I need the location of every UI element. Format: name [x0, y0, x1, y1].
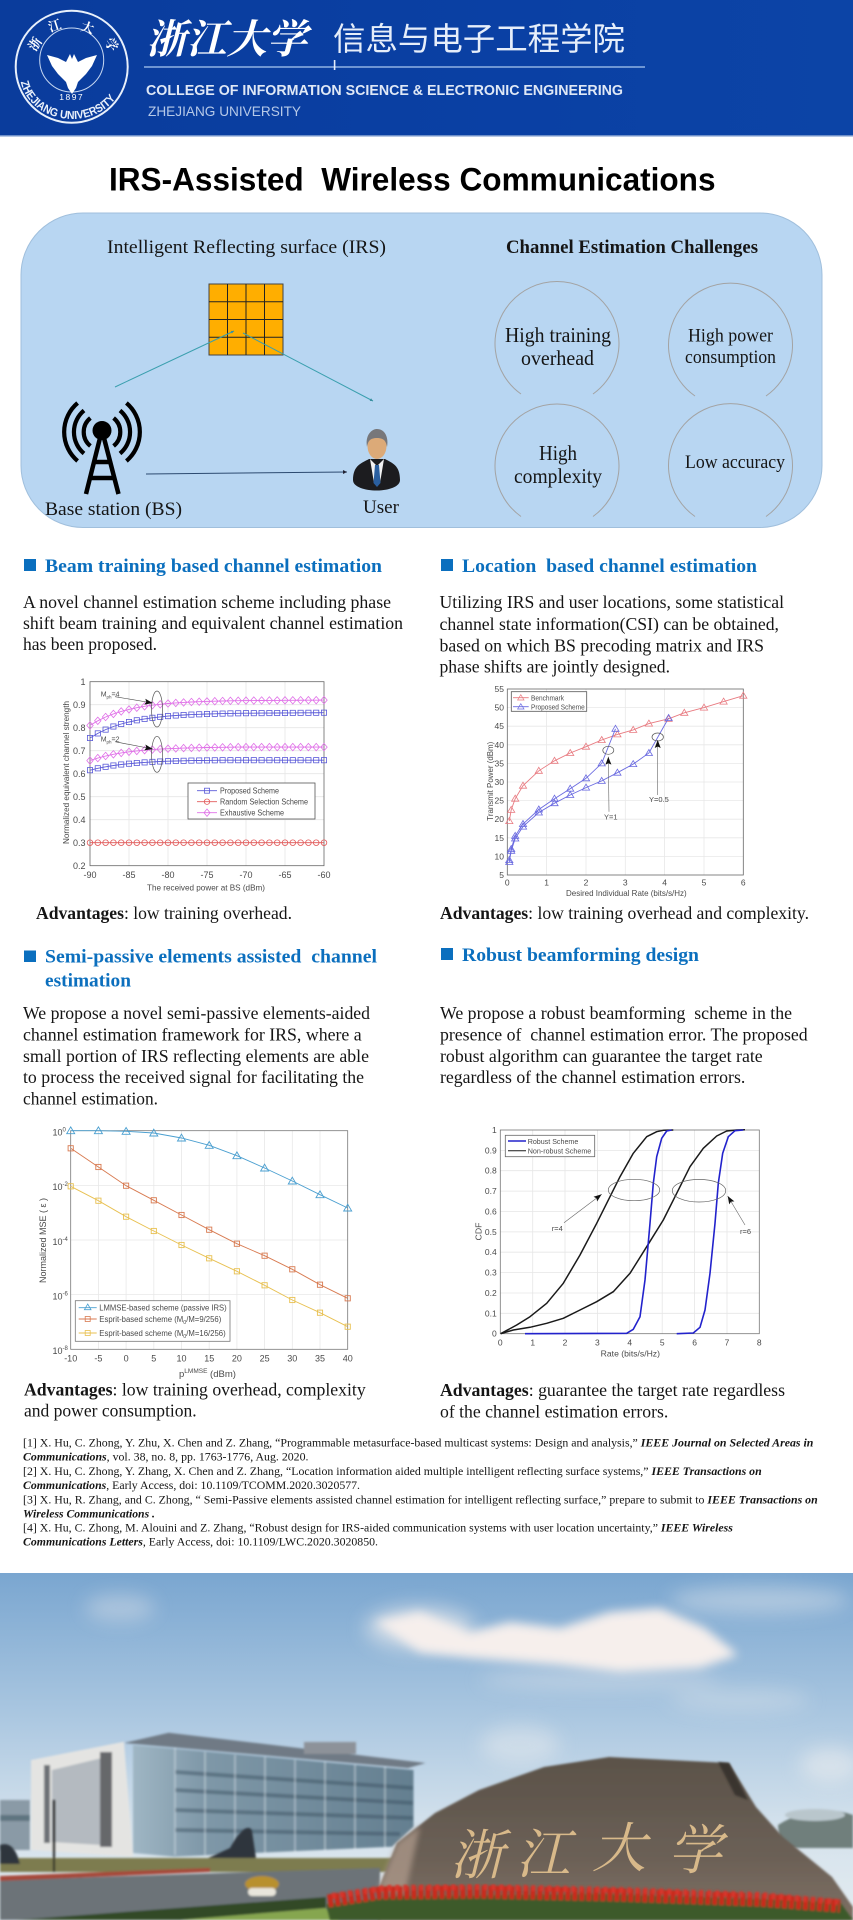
- heading: Semi-passive elements assisted channel: [45, 948, 377, 968]
- line chart: CDF of rate: 0.9: [485, 1145, 497, 1155]
- line chart: CDF of rate: 0.8: [485, 1166, 497, 1176]
- body text: We propose a novel semi-passive elements-aided: [23, 1003, 370, 1023]
- icon: base station: [64, 403, 140, 494]
- legend: Benchmark: [531, 693, 564, 702]
- line chart: CDF of rate: 1: [492, 1125, 497, 1135]
- legend: [75, 1301, 230, 1341]
- distant buildings: [0, 1800, 853, 1850]
- references: Communications, Early Access, doi: 10.1109/TCOMM.2020.3020577.: [23, 1480, 360, 1492]
- advantages: [440, 1380, 785, 1421]
- line chart: transmit power: 5: [499, 870, 504, 880]
- challenge: high complexity: High: [539, 441, 577, 465]
- references: [4] X. Hu, C. Zhong, M. Alouini and Z. Zhang, “Robust design for IRS-aided communication systems with user location uncertainty,” IEEE Wireless: [23, 1523, 733, 1535]
- line chart: CDF of rate: 3: [595, 1338, 600, 1348]
- line chart: normalized MSE: -6: [63, 1291, 69, 1297]
- body text: [23, 592, 403, 654]
- panel: location based: [440, 557, 809, 923]
- references: Communications Letters , Early Access, doi: 10.1109/LWC.2020.3020850.: [23, 1537, 378, 1549]
- line chart: transmit power: Υ=1: [604, 812, 618, 821]
- line chart: CDF of rate: 0.6: [485, 1206, 497, 1216]
- line chart: normalized MSE: 10: [52, 1346, 63, 1356]
- body text: shift beam training and equivalent channel estimation: [23, 613, 403, 633]
- line chart: CDF of rate: 0: [492, 1329, 497, 1339]
- line chart: equivalent channel strength: 1: [80, 677, 86, 687]
- icon: university logo seal: [14, 10, 129, 124]
- line chart: CDF of rate: 0.3: [485, 1268, 497, 1278]
- legend: Proposed Scheme: [531, 702, 585, 711]
- line chart: normalized MSE: 35: [315, 1354, 325, 1364]
- line chart: equivalent channel strength: 0.5: [73, 792, 86, 802]
- body text: [440, 1003, 808, 1087]
- references: [23, 1438, 818, 1549]
- references: [2] X. Hu, C. Zhong, Y. Zhang, X. Chen and Z. Zhang, “Location information aided multiple intelligent reflecting surface systems,” IEEE Transactions on: [23, 1466, 762, 1478]
- icon: university logo seal: 大: [79, 16, 97, 38]
- legend: Robust Scheme: [528, 1137, 578, 1146]
- legend: Proposed Scheme: [220, 786, 279, 796]
- line chart: transmit power: 30: [495, 777, 504, 787]
- body text: robust algorithm can guarantee the target rate: [440, 1046, 763, 1066]
- stone: [378, 1757, 853, 1920]
- line chart: CDF of rate: 4: [627, 1338, 632, 1348]
- challenge: high power consumption: [668, 283, 792, 396]
- line chart: equivalent channel strength: -70: [239, 870, 253, 880]
- line chart: CDF of rate: 7: [725, 1338, 730, 1348]
- line chart: normalized MSE: 10: [52, 1182, 63, 1192]
- line chart: equivalent channel strength: M: [101, 692, 107, 699]
- line chart: normalized MSE: 10: [52, 1128, 63, 1138]
- heading: [45, 948, 377, 992]
- line chart: transmit power: 45: [495, 721, 504, 731]
- line chart: normalized MSE: [38, 1128, 353, 1380]
- legend: Esprit-based scheme (M: [99, 1315, 186, 1324]
- line chart: transmit power: 6: [741, 878, 746, 888]
- line chart: equivalent channel strength: 0.4: [73, 815, 86, 825]
- line chart: equivalent channel strength: -60: [317, 870, 331, 880]
- campus photo illustration: [0, 1573, 853, 1920]
- panel: semi-passive elements: [23, 948, 377, 1420]
- line chart: normalized MSE: -10: [64, 1354, 77, 1364]
- line chart: CDF of rate: 0.7: [485, 1186, 497, 1196]
- line chart: CDF of rate: [474, 1125, 762, 1359]
- line chart: equivalent channel strength: -90: [83, 870, 97, 880]
- challenge: low accuracy: Low accuracy: [685, 453, 786, 473]
- line chart: normalized MSE: -4: [63, 1237, 69, 1243]
- line chart: normalized MSE: Normalized MSE ( ε ): [38, 1198, 49, 1283]
- line chart: transmit power: 4: [662, 878, 667, 888]
- body text: small portion of IRS reflecting elements are able: [23, 1046, 369, 1066]
- legend: Esprit-based scheme (M: [99, 1329, 186, 1338]
- line chart: transmit power: Υ=0.5: [649, 795, 669, 804]
- body text: channel estimation framework for IRS, where a: [23, 1024, 362, 1044]
- references: Wireless Communications .: [23, 1508, 155, 1520]
- heading: Location based channel estimation: [462, 557, 758, 577]
- line chart: normalized MSE: 5: [151, 1354, 156, 1364]
- line chart: equivalent channel strength: 0.3: [73, 838, 86, 848]
- title: IRS-Assisted Wireless Communications: [109, 162, 716, 198]
- line chart: transmit power: [485, 684, 746, 898]
- line chart: CDF of rate: 0.5: [485, 1227, 497, 1237]
- heading: IRS: Intelligent Reflecting surface (IRS): [107, 238, 386, 258]
- challenge: high training overhead: High training: [505, 323, 611, 347]
- icon: university logo seal: ZHEJIANG UNIVERSITY: [20, 80, 114, 119]
- line chart: normalized MSE: 10: [52, 1291, 63, 1301]
- flowers: [326, 1887, 853, 1920]
- body text: has been proposed.: [23, 634, 157, 654]
- challenge: high training overhead: [495, 282, 619, 394]
- body text: [23, 1003, 370, 1108]
- bullet: [24, 559, 36, 571]
- line chart: CDF of rate: r=6: [740, 1227, 751, 1236]
- line chart: equivalent channel strength: 0.2: [73, 861, 86, 871]
- advantages: [24, 1379, 367, 1420]
- line chart: transmit power: 50: [495, 703, 504, 713]
- icon: university logo seal: 江: [45, 14, 64, 36]
- references: [3] X. Hu, R. Zhang, and C. Zhong, “ Semi-Passive elements assisted channel estimation for intelligent reflecting surface,” prepare to submit to IEEE Transactions on: [23, 1494, 818, 1506]
- legend: Random Selection Scheme: [220, 798, 308, 806]
- line chart: equivalent channel strength: ph: [107, 695, 112, 700]
- line chart: CDF of rate: Rate (bits/s/Hz): [601, 1349, 660, 1359]
- road and lawn: [0, 1800, 400, 1920]
- line chart: equivalent channel strength: -85: [122, 870, 136, 880]
- challenge: high training overhead: overhead: [521, 346, 594, 370]
- legend: [188, 783, 315, 819]
- label: user: User: [363, 498, 399, 518]
- line chart: CDF of rate: 0: [498, 1338, 503, 1348]
- line chart: equivalent channel strength: 0.8: [73, 723, 86, 733]
- line chart: normalized MSE: LMMSE: [184, 1368, 208, 1375]
- line chart: equivalent channel strength: -80: [161, 870, 175, 880]
- line chart: CDF of rate: 0.4: [485, 1247, 497, 1257]
- arrow: IRS to user: [243, 333, 373, 401]
- challenge: high complexity: [495, 404, 619, 516]
- university name English: ZHEJIANG UNIVERSITY: [148, 103, 302, 119]
- header banner: [0, 0, 853, 136]
- panel: IRS overview and challenges: [21, 213, 822, 528]
- bullet: [441, 559, 453, 571]
- icon: IRS grid: [209, 284, 283, 355]
- line chart: transmit power: 2: [584, 878, 589, 888]
- icon: university logo seal: 1897: [59, 92, 84, 102]
- references: [1] X. Hu, C. Zhong, Y. Zhu, X. Chen and Z. Zhang, “Programmable metasurface-based multicast systems: Design and analysis,” IEEE Journal on Selected Areas in: [23, 1438, 813, 1450]
- legend: /M=16/256): [186, 1329, 226, 1338]
- legend: [511, 692, 587, 711]
- line chart: equivalent channel strength: 0.6: [73, 769, 86, 779]
- calligraphy name: 浙江大学: [146, 8, 312, 65]
- line chart: transmit power: 1: [544, 878, 549, 888]
- body text: phase shifts are jointly designed.: [440, 656, 670, 676]
- line chart: transmit power: 35: [495, 758, 504, 768]
- line chart: equivalent channel strength: -75: [200, 870, 214, 880]
- legend: 0: [183, 1320, 186, 1326]
- legend: LMMSE-based scheme (passive IRS): [99, 1304, 227, 1312]
- challenge: high power consumption: consumption: [685, 348, 776, 368]
- line chart: transmit power: 15: [495, 833, 504, 843]
- body text: channel estimation.: [23, 1088, 158, 1108]
- line chart: CDF of rate: r=4: [552, 1224, 563, 1233]
- advantages: and power consumption.: [24, 1400, 197, 1420]
- heading: Robust beamforming design: [462, 946, 700, 966]
- line chart: normalized MSE: (dBm): [207, 1369, 236, 1380]
- line chart: transmit power: 5: [702, 878, 707, 888]
- line chart: transmit power: 55: [495, 684, 504, 694]
- body text: channel state information(CSI) can be obtained,: [440, 614, 779, 635]
- panel: beam training: [23, 557, 403, 923]
- line chart: transmit power: Desired Individual Rate (bits/s/Hz): [566, 888, 687, 898]
- line chart: transmit power: Transmit Power (dBm): [485, 742, 495, 821]
- line chart: normalized MSE: 25: [260, 1354, 270, 1364]
- advantages: Advantages: low training overhead.: [36, 903, 292, 923]
- line chart: equivalent channel strength: The received power at BS (dBm): [147, 883, 265, 893]
- building: [31, 1733, 426, 1857]
- line chart: normalized MSE: -5: [94, 1354, 102, 1364]
- line chart: transmit power: 3: [623, 878, 628, 888]
- body text: A novel channel estimation scheme including phase: [23, 592, 391, 612]
- references: Communications, vol. 38, no. 8, pp. 1763-1776, Aug. 2020.: [23, 1452, 309, 1464]
- heading: challenges: Channel Estimation Challenges: [506, 238, 758, 258]
- line chart: equivalent channel strength: 0.9: [73, 700, 86, 710]
- legend: /M=9/256): [186, 1315, 222, 1324]
- line chart: normalized MSE: p: [179, 1369, 184, 1380]
- line chart: normalized MSE: 30: [287, 1354, 297, 1364]
- icon: university logo seal: 学: [101, 33, 124, 55]
- line chart: CDF of rate: 2: [563, 1338, 568, 1348]
- heading: estimation: [45, 972, 132, 992]
- line chart: equivalent channel strength: Normalized equivalent channel strength: [61, 701, 71, 844]
- line chart: CDF of rate: 8: [757, 1338, 762, 1348]
- line chart: equivalent channel strength: [61, 677, 331, 893]
- body text: presence of channel estimation error. The proposed: [440, 1024, 808, 1044]
- body text: regardless of the channel estimation errors.: [440, 1067, 745, 1087]
- stone inscription: 浙江大学: [450, 1806, 729, 1890]
- line chart: normalized MSE: 0: [124, 1354, 129, 1364]
- line chart: transmit power: 20: [495, 814, 504, 824]
- line chart: normalized MSE: -8: [63, 1346, 69, 1352]
- line chart: normalized MSE: 20: [232, 1354, 242, 1364]
- heading: Beam training based channel estimation: [45, 557, 383, 577]
- line chart: equivalent channel strength: -65: [278, 870, 292, 880]
- line chart: transmit power: 10: [495, 851, 504, 861]
- body text: Utilizing IRS and user locations, some statistical: [440, 592, 784, 612]
- legend: [505, 1135, 595, 1157]
- icon: user: [353, 429, 400, 490]
- legend: 0: [183, 1334, 186, 1340]
- challenge: high complexity: complexity: [514, 464, 602, 488]
- icon: university logo seal: 浙: [23, 33, 46, 54]
- college name English: COLLEGE OF INFORMATION SCIENCE & ELECTRONIC ENGINEERING: [146, 83, 623, 99]
- line chart: transmit power: 0: [505, 878, 510, 888]
- line chart: equivalent channel strength: M: [101, 737, 107, 744]
- line chart: equivalent channel strength: =4: [112, 692, 120, 699]
- challenge: low accuracy: [668, 404, 792, 516]
- line chart: CDF of rate: 5: [660, 1338, 665, 1348]
- legend: Exhaustive Scheme: [220, 808, 284, 818]
- legend: Non-robust Scheme: [528, 1146, 591, 1156]
- body text: [440, 592, 784, 676]
- advantages: of the channel estimation errors.: [440, 1401, 668, 1421]
- line chart: CDF of rate: 0.2: [485, 1288, 497, 1298]
- line chart: CDF of rate: 0.1: [485, 1308, 497, 1318]
- college name Chinese: 信息与电子工程学院: [333, 14, 625, 60]
- arrow: BS to IRS: [115, 331, 234, 387]
- clouds: [85, 1586, 853, 1783]
- line chart: equivalent channel strength: 0.7: [73, 746, 86, 756]
- line chart: normalized MSE: 0: [63, 1128, 67, 1134]
- challenge: high power consumption: High power: [688, 326, 773, 346]
- bullet: [441, 948, 453, 960]
- line chart: CDF of rate: CDF: [474, 1222, 484, 1240]
- line chart: normalized MSE: 10: [52, 1237, 63, 1247]
- label: base station: Base station (BS): [45, 500, 182, 520]
- bullet: [24, 950, 36, 962]
- line chart: equivalent channel strength: ph: [107, 740, 112, 745]
- arrow: BS to user: [146, 472, 347, 474]
- line chart: transmit power: 25: [495, 796, 504, 806]
- line chart: normalized MSE: -2: [63, 1182, 69, 1188]
- advantages: Advantages: low training overhead and complexity.: [440, 903, 809, 923]
- line chart: transmit power: 40: [495, 740, 504, 750]
- line chart: CDF of rate: 1: [530, 1338, 535, 1348]
- body text: based on which BS precoding matrix and IRS: [440, 636, 764, 656]
- line chart: normalized MSE: 10: [176, 1354, 187, 1364]
- body text: to process the received signal for facilitating the: [23, 1067, 364, 1087]
- panel: robust beamforming: [440, 946, 808, 1421]
- body text: We propose a robust beamforming scheme in the: [440, 1003, 792, 1023]
- advantages: Advantages: low training overhead, complexity: [24, 1379, 367, 1399]
- advantages: Advantages: guarantee the target rate regardless: [440, 1380, 785, 1400]
- line chart: normalized MSE: 40: [343, 1354, 353, 1364]
- line chart: CDF of rate: 6: [692, 1338, 697, 1348]
- line chart: equivalent channel strength: =2: [112, 737, 120, 744]
- line chart: normalized MSE: 15: [204, 1354, 214, 1364]
